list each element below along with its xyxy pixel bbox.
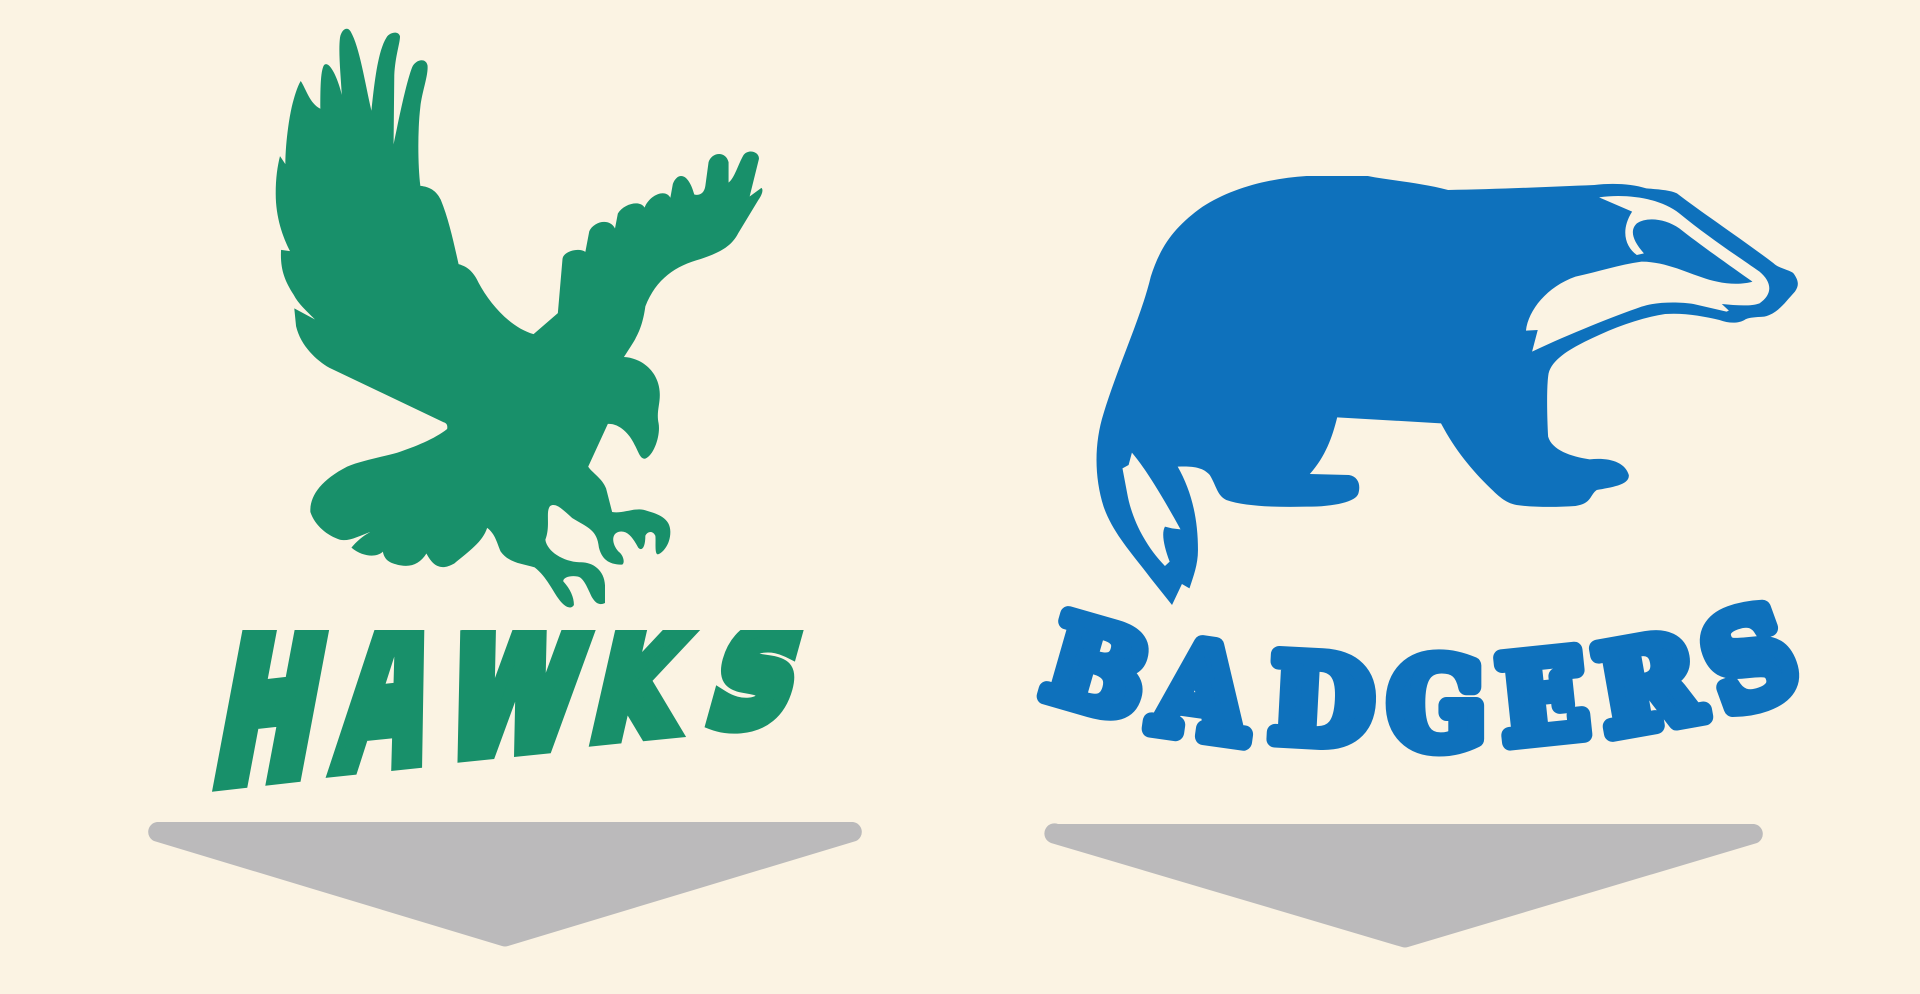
- wordmark: HAWKS: [212, 630, 804, 792]
- wordmark: BADGERS: E: [1493, 626, 1593, 770]
- wordmark: HAWKS: K: [580, 604, 702, 772]
- wordmark: BADGERS: G: [1389, 636, 1485, 775]
- wordmark: BADGERS: R: [1588, 608, 1710, 762]
- wordmark: HAWKS: S: [695, 599, 818, 757]
- wordmark: BADGERS: [1032, 578, 1814, 775]
- wordmark: BADGERS: B: [1032, 591, 1163, 748]
- panel: badgers: [1032, 176, 1814, 947]
- wordmark: HAWKS: W: [434, 595, 600, 793]
- icon: hawk silhouette: [276, 29, 762, 607]
- icon: badger silhouette: [1097, 176, 1798, 605]
- wordmark: HAWKS: A: [323, 527, 458, 826]
- infographic canvas: [148, 28, 1800, 948]
- arrow: hawks down arrow: [148, 822, 862, 946]
- wordmark: BADGERS: S: [1685, 578, 1814, 743]
- wordmark: BADGERS: A: [1146, 613, 1260, 771]
- arrow: badgers down arrow: [1044, 823, 1763, 948]
- panel: hawks: [148, 29, 862, 947]
- wordmark: HAWKS: H: [202, 593, 340, 826]
- wordmark: BADGERS: D: [1268, 631, 1376, 772]
